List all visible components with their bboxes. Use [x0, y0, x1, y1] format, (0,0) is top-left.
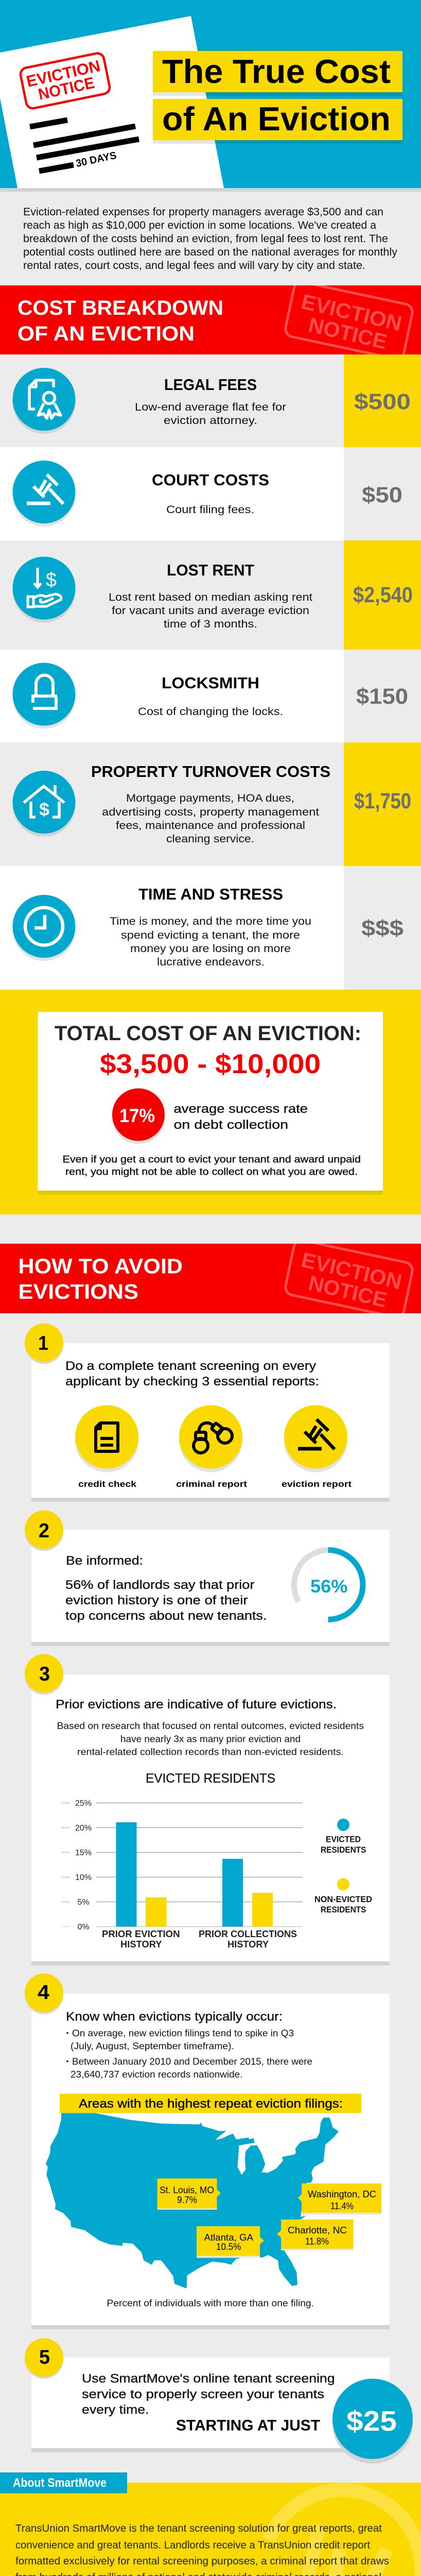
- bullet list: Between January 2010 and December 2015, there were: [72, 2057, 312, 2067]
- stamp watermark: NOTICE: [306, 1271, 389, 1312]
- panel: about SmartMove: [0, 2483, 421, 2576]
- cost row: court costs: COURT COSTS: [152, 471, 269, 489]
- cost row: lost rent: $2,540: [353, 583, 413, 607]
- section heading: cost breakdown: [0, 285, 421, 354]
- cost row: locksmith: $150: [356, 684, 408, 709]
- cost row: legal fees: LEGAL FEES: [164, 376, 257, 394]
- section heading: cost breakdown: OF AN EVICTION: [17, 323, 195, 345]
- icon: eviction gavel: [284, 1405, 347, 1472]
- panel: step 3: EVICTED RESIDENTS: [146, 1771, 275, 1786]
- bar chart: evicted residents: 15%: [75, 1849, 92, 1857]
- bullet list: On average, new eviction filings tend to spike in Q3: [72, 2028, 294, 2038]
- stamp watermark: [284, 285, 414, 354]
- panel: total cost: [0, 990, 421, 1214]
- eviction notice paper: NOTICE: [37, 74, 96, 104]
- stat: 17 percent: 17%: [119, 1105, 155, 1126]
- map of united states: [46, 2113, 339, 2289]
- cost row: lost rent: [0, 540, 421, 650]
- callout: Charlotte: 11.8%: [305, 2236, 329, 2246]
- panel: step 2: eviction history is one of their: [65, 1594, 248, 1607]
- cost row: property turnover costs: Mortgage payments, HOA dues,: [126, 792, 294, 804]
- bar chart: evicted residents: 10%: [75, 1873, 92, 1882]
- icon: credit check: [75, 1405, 138, 1472]
- step number 2: [25, 1511, 63, 1551]
- cost row: time and stress: $$$: [361, 916, 404, 941]
- panel: total cost: TOTAL COST OF AN EVICTION:: [55, 1022, 361, 1045]
- panel: step 5: STARTING AT JUST: [176, 2417, 320, 2434]
- step number 3: 3: [39, 1663, 50, 1685]
- callout: Washington: [298, 2183, 381, 2215]
- about text: TransUnion SmartMove is the tenant screening solution for great reports, great: [15, 2523, 382, 2534]
- tab heading: about SmartMove: About SmartMove: [13, 2476, 107, 2490]
- section heading: how to avoid evictions: [0, 1244, 421, 1313]
- title: of An Eviction: [162, 100, 391, 138]
- price badge: $25: $25: [346, 2405, 397, 2437]
- bar chart: evicted residents: PRIOR EVICTION: [102, 1929, 180, 1939]
- cost row: time and stress: money you are losing on more: [130, 943, 291, 955]
- panel: step 3: rental-related collection records than non-evicted residents.: [77, 1747, 344, 1757]
- about text: formatted exclusively for rental screening purposes, a criminal report that draws: [15, 2555, 389, 2567]
- cost row: legal fees: eviction attorney.: [164, 415, 257, 427]
- cost row: property turnover costs: $1,750: [354, 789, 411, 814]
- step number 1: 1: [38, 1332, 48, 1354]
- bar chart: evicted residents: PRIOR COLLECTIONS: [199, 1929, 297, 1939]
- eviction notice paper: 30 DAYS: [75, 150, 117, 170]
- donut chart: 56 percent: 56%: [310, 1577, 348, 1597]
- panel: total cost: $3,500 - $10,000: [100, 1049, 321, 1079]
- cost row: time and stress: TIME AND STRESS: [138, 885, 283, 903]
- about text: convenience and great tenants. Landlords receive a TransUnion credit report: [15, 2540, 370, 2551]
- intro text: rental rates, court costs, and legal fees and will vary by city and state.: [23, 260, 365, 272]
- panel: step 5: [25, 2338, 413, 2464]
- step number 4: [25, 1973, 63, 2014]
- panel: step 3: have nearly 3x as many prior eviction and: [120, 1734, 301, 1744]
- price badge: $25: [332, 2379, 413, 2464]
- legend: EVICTED: [326, 1835, 361, 1844]
- callout: Atlanta: [197, 2226, 264, 2258]
- callout: Atlanta: Atlanta, GA: [204, 2232, 253, 2243]
- bar chart: evicted residents: [61, 1799, 303, 1950]
- cost row: lost rent: time of 3 months.: [164, 618, 257, 630]
- cost row: lost rent: for vacant units and average eviction: [112, 605, 309, 617]
- stamp watermark: NOTICE: [306, 313, 389, 354]
- callout: Washington: 11.4%: [330, 2201, 354, 2211]
- panel: step 2: 56% of landlords say that prior: [65, 1578, 254, 1592]
- panel: step 3: [25, 1654, 390, 1965]
- cost row: lost rent: LOST RENT: [167, 561, 254, 579]
- panel: step 1: Do a complete tenant screening on every: [65, 1359, 316, 1373]
- panel: step 1: criminal report: [176, 1479, 247, 1489]
- callout: Atlanta: 10.5%: [216, 2242, 241, 2252]
- cost row: court costs: $50: [362, 483, 402, 507]
- panel: step 4: [25, 1973, 390, 2329]
- icon: handcuffs: [179, 1405, 242, 1472]
- callout: Charlotte: [277, 2219, 353, 2250]
- icon: certificate: [29, 380, 61, 418]
- map heading: Areas with the highest repeat eviction filings:: [79, 2097, 343, 2111]
- stamp watermark: EVICTION: [299, 290, 404, 336]
- callout: St. Louis: St. Louis, MO: [160, 2185, 214, 2195]
- legend: RESIDENTS: [321, 1905, 366, 1914]
- bar chart: evicted residents: 0%: [77, 1923, 90, 1931]
- cost row: legal fees: $500: [354, 389, 411, 414]
- cost row: court costs: [0, 447, 421, 540]
- icon: hand with money: [28, 568, 61, 607]
- cost row: property turnover costs: [0, 742, 421, 866]
- panel: step 5: every time.: [82, 2403, 149, 2417]
- panel: step 2: Be informed:: [66, 1554, 143, 1568]
- panel: step 1: credit check: [78, 1479, 137, 1489]
- stamp watermark: [284, 1244, 414, 1313]
- panel: total cost: on debt collection: [174, 1118, 288, 1132]
- panel: step 1: [25, 1323, 390, 1502]
- intro text: potential costs outlined here are based on the national averages for monthly: [23, 246, 398, 258]
- cost row: property turnover costs: advertising costs, property management: [102, 806, 319, 818]
- step number 5: 5: [39, 2346, 50, 2368]
- panel: total cost: average success rate: [174, 1102, 308, 1116]
- cost row: time and stress: spend evicting a tenant, the more: [121, 929, 300, 941]
- icon: lock: [33, 675, 57, 708]
- cost row: lost rent: Lost rent based on median asking rent: [109, 591, 312, 603]
- intro text: [23, 206, 398, 272]
- bar chart: evicted residents: 25%: [75, 1799, 92, 1808]
- about text: [15, 2523, 389, 2576]
- step number 4: 4: [38, 1981, 49, 2004]
- legend: [314, 1819, 372, 1914]
- panel: step 5: service to properly screen your tenants: [82, 2387, 324, 2401]
- panel: step 1: eviction report: [282, 1479, 352, 1489]
- bullet list: [66, 2028, 312, 2079]
- eviction notice paper: [0, 16, 224, 188]
- callout: Charlotte: Charlotte, NC: [288, 2225, 347, 2235]
- donut chart: 56 percent: [294, 1550, 363, 1620]
- bar chart: evicted residents: 20%: [75, 1824, 92, 1833]
- hero banner: [0, 0, 421, 192]
- panel: step 4: Percent of individuals with more than one filing.: [107, 2298, 314, 2308]
- icon: house with dollar: [24, 785, 64, 817]
- panel: step 3: Prior evictions are indicative of future evictions.: [56, 1698, 337, 1711]
- tab heading: about SmartMove: [0, 2472, 127, 2494]
- bar chart: evicted residents: HISTORY: [120, 1939, 162, 1950]
- panel: step 5: Use SmartMove's online tenant screening: [82, 2372, 335, 2385]
- cost row: property turnover costs: fees, maintenance and professional: [116, 820, 305, 832]
- bar chart: evicted residents: 5%: [77, 1898, 90, 1907]
- legend: RESIDENTS: [321, 1845, 366, 1855]
- icon: clock: [25, 908, 63, 945]
- legend: NON-EVICTED: [314, 1895, 372, 1904]
- eviction notice paper: EVICTION: [25, 57, 102, 91]
- map heading: [60, 2094, 361, 2113]
- step number 5: [25, 2338, 63, 2379]
- bullet list: (July, August, September timeframe).: [71, 2041, 234, 2052]
- cost row: time and stress: Time is money, and the more time you: [110, 916, 311, 927]
- cost row: court costs: Court filing fees.: [166, 504, 254, 516]
- cost row: property turnover costs: PROPERTY TURNOVER COSTS: [91, 762, 330, 781]
- panel: step 2: top concerns about new tenants.: [65, 1609, 267, 1623]
- step number 1: [25, 1323, 63, 1364]
- panel: step 1: applicant by checking 3 essential reports:: [65, 1375, 319, 1388]
- icon: gavel: [27, 474, 63, 504]
- intro text: Eviction-related expenses for property managers average $3,500 and can: [23, 206, 383, 218]
- panel: step 4: Know when evictions typically occur:: [66, 2010, 283, 2024]
- cost row: lost rent: $: [46, 569, 57, 591]
- cost row: locksmith: [0, 650, 421, 742]
- callout: Washington: Washington, DC: [308, 2189, 376, 2199]
- callout: St. Louis: [157, 2178, 221, 2210]
- step number 3: [25, 1654, 63, 1695]
- cost row: locksmith: Cost of changing the locks.: [138, 706, 283, 718]
- section heading: cost breakdown: COST BREAKDOWN: [17, 297, 223, 319]
- cost row: time and stress: lucrative endeavors.: [157, 956, 265, 968]
- cost row: locksmith: LOCKSMITH: [162, 674, 259, 692]
- cost row: legal fees: Low-end average flat fee for: [135, 401, 286, 413]
- bar chart: evicted residents: HISTORY: [227, 1939, 269, 1950]
- panel: step 2: [25, 1511, 390, 1646]
- cost row: property turnover costs: cleaning service.: [166, 833, 254, 845]
- intro text: breakdown of the costs behind an eviction, from legal fees to lost rent. The: [23, 233, 388, 245]
- cost row: legal fees: [0, 354, 421, 447]
- cost row: property turnover costs: $: [39, 800, 49, 820]
- section heading: how to avoid evictions: HOW TO AVOID: [19, 1254, 183, 1278]
- title: [153, 51, 402, 144]
- section heading: how to avoid evictions: EVICTIONS: [19, 1280, 138, 1303]
- callout: St. Louis: 9.7%: [177, 2195, 197, 2205]
- panel: total cost: Even if you get a court to evict your tenant and award unpaid: [63, 1154, 361, 1165]
- panel: step 3: Based on research that focused on rental outcomes, evicted residents: [57, 1721, 364, 1731]
- title: The True Cost: [162, 53, 391, 90]
- logo watermark: [265, 2490, 421, 2576]
- panel: total cost: rent, you might not be able to collect on what you are owed.: [65, 1166, 358, 1178]
- intro text: reach as high as $10,000 per eviction in some locations. We've created a: [23, 219, 376, 231]
- step number 2: 2: [39, 1520, 49, 1542]
- stat: 17 percent: [112, 1088, 165, 1144]
- stamp watermark: EVICTION: [299, 1248, 404, 1294]
- cost row: time and stress: [0, 866, 421, 990]
- bullet list: 23,640,737 eviction records nationwide.: [71, 2069, 242, 2079]
